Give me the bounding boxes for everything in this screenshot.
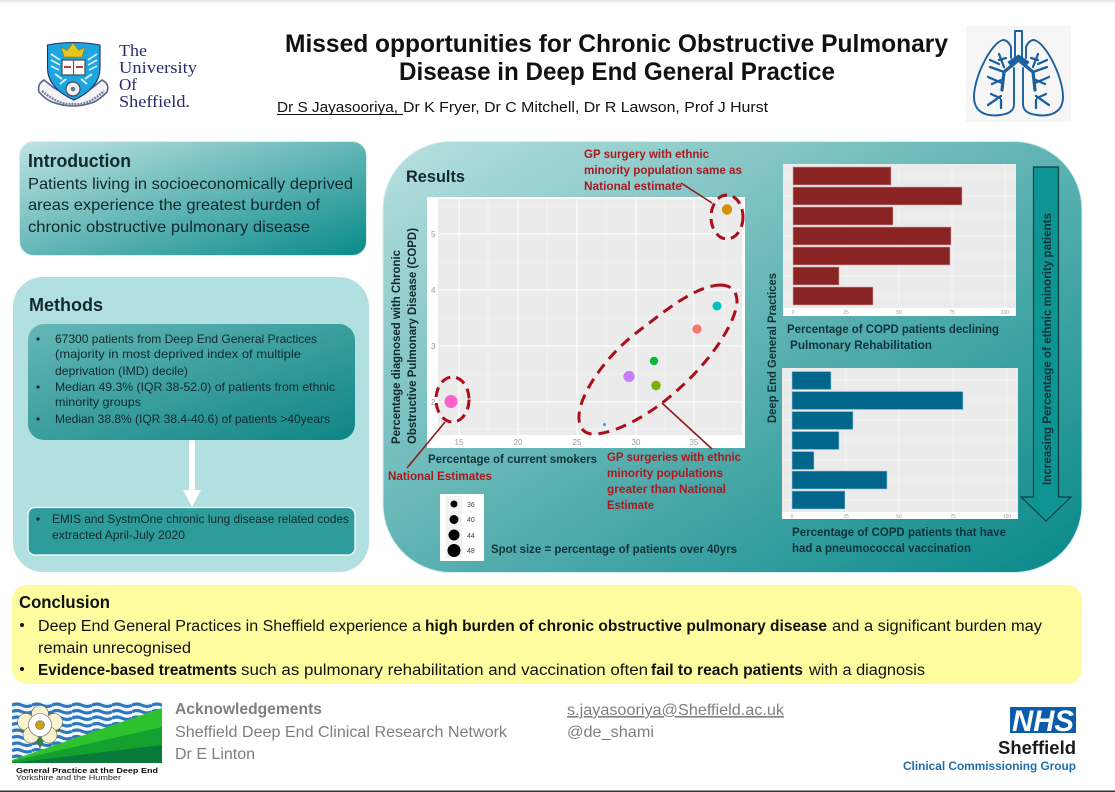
wordmark: The — [119, 41, 147, 60]
text: contact details: @de_shami — [567, 724, 654, 741]
bar chart: declining pulmonary rehabilitation: 25 — [843, 310, 849, 316]
text: acknowledgements: Acknowledgements — [175, 701, 322, 718]
caption: declining pulmonary rehabilitation: Percentage of COPD patients declining — [787, 322, 999, 336]
axis tick labels: 4 — [431, 286, 436, 295]
logo: general practice at the deep end: General Practice at the Deep End — [16, 766, 158, 775]
callout: greater than national estimate: greater than National — [607, 482, 726, 496]
heading: introduction: Introduction — [28, 151, 131, 171]
box: study population: Median 38.8% (IQR 38.4-40.6) of patients >40years — [55, 412, 330, 426]
bar chart: pneumococcal vaccination: 0 — [791, 514, 794, 520]
text: introduction body — [28, 176, 353, 236]
heading: methods: Methods — [29, 295, 103, 315]
title: Missed opportunities for Chronic Obstructive Pulmonary — [285, 30, 948, 58]
text: introduction body: areas experience the greatest burden of — [28, 197, 321, 214]
panel: methods — [13, 277, 369, 572]
heading: results: Results — [406, 167, 465, 186]
panel: introduction — [20, 142, 366, 256]
callout: national estimates: National Estimates — [388, 469, 492, 483]
box: study population: 67300 patients from Deep End General Practices — [55, 332, 317, 346]
arrow: increasing ethnic minority patients: Increasing Percentage of ethnic minority patients — [1040, 213, 1054, 485]
legend: spot size: 40 — [467, 517, 475, 524]
text: introduction body: chronic obstructive pulmonary disease — [28, 219, 310, 236]
text: conclusion bullets: remain unrecognised — [38, 640, 191, 657]
wordmark: University — [119, 58, 198, 77]
wordmark: Sheffield. — [119, 92, 190, 111]
caption: pneumococcal vaccination — [792, 525, 1006, 555]
wordmark: Of — [119, 75, 137, 94]
text: conclusion bullets: with a diagnosis — [808, 662, 925, 679]
text: conclusion bullets: fail to reach patients — [651, 662, 803, 679]
box: study population: deprivation (IMD) decile) — [55, 364, 188, 378]
axis tick labels: 15 — [455, 438, 464, 447]
bar chart: declining pulmonary rehabilitation: 75 — [949, 310, 955, 316]
text: acknowledgements: Dr E Linton — [175, 746, 255, 763]
icon: university crest — [39, 42, 108, 106]
text: conclusion bullets: such as pulmonary rehabilitation and vaccination often — [241, 662, 648, 679]
bar chart: declining pulmonary rehabilitation: 50 — [896, 310, 902, 316]
arrow: increasing ethnic minority patients — [1021, 167, 1071, 521]
scatter chart — [427, 197, 745, 448]
bar chart: declining pulmonary rehabilitation: 0 — [792, 310, 795, 316]
callout: same as national estimate: minority population same as — [584, 163, 742, 177]
callout: same as national estimate: GP surgery with ethnic — [584, 147, 709, 161]
panel: conclusion — [12, 585, 1082, 684]
text: conclusion bullets: and a significant burden may — [832, 618, 1042, 635]
axis tick labels: 3 — [431, 342, 436, 351]
legend: spot size: 44 — [467, 533, 475, 540]
callout: greater than national estimate: minority populations — [607, 466, 723, 480]
logo: NHS Sheffield CCG: Clinical Commissioning Group — [903, 759, 1076, 773]
callout: greater than national estimate: GP surgeries with ethnic — [607, 450, 741, 464]
text: conclusion bullets: Deep End General Practices in Sheffield experience a — [38, 618, 421, 635]
logo: NHS Sheffield CCG: NHS — [1012, 705, 1074, 738]
text: contact details — [567, 702, 785, 741]
callout: national estimates — [388, 377, 492, 483]
caption: declining pulmonary rehabilitation — [787, 322, 999, 352]
y axis title: scatter — [389, 228, 419, 444]
y axis title: scatter: Obstructive Pulmonary Disease (COPD) — [405, 228, 419, 444]
axis tick labels — [431, 230, 699, 447]
bar chart: pneumococcal vaccination: 50 — [896, 514, 902, 520]
arrow: methods flow — [183, 440, 201, 507]
logo: NHS Sheffield CCG — [903, 705, 1076, 773]
callout: same as national estimate: National estimate — [584, 179, 682, 193]
icon: lungs — [966, 26, 1071, 122]
bar chart: declining pulmonary rehabilitation: 100 — [1001, 310, 1009, 316]
bar chart: pneumococcal vaccination: 100 — [1003, 514, 1011, 520]
callout: greater than national estimate — [579, 285, 741, 512]
axis tick labels: 20 — [514, 438, 523, 447]
panel: results — [383, 142, 1082, 572]
text: contact details: s.jayasooriya@Sheffield.ac.uk — [567, 702, 785, 719]
box: data extraction: EMIS and SystmOne chronic lung disease related codes — [52, 512, 349, 526]
box: study population: (majority in most deprived index of multiple — [55, 347, 301, 361]
axis tick labels: 30 — [632, 438, 641, 447]
title: Disease in Deep End General Practice — [399, 58, 835, 86]
logo: NHS Sheffield CCG: Sheffield — [998, 738, 1076, 758]
axis tick labels: 5 — [431, 230, 436, 239]
title — [285, 30, 948, 86]
legend: spot size — [440, 494, 484, 561]
bar chart: pneumococcal vaccination — [782, 368, 1018, 520]
text: introduction body: Patients living in socioeconomically deprived — [28, 176, 353, 193]
text: acknowledgements — [175, 701, 508, 763]
logo: general practice at the deep end — [12, 702, 162, 782]
text: conclusion bullets: Evidence-based treatments — [38, 662, 237, 679]
legend caption: Spot size = percentage of patients over 40yrs — [491, 542, 737, 556]
y axis title: bar charts: Deep End General Practices — [765, 273, 779, 423]
text: conclusion bullets: high burden of chronic obstructive pulmonary disease — [425, 618, 827, 635]
logo: general practice at the deep end: Yorkshire and the Humber — [16, 773, 122, 782]
caption: pneumococcal vaccination: had a pneumococcal vaccination — [792, 541, 971, 555]
text: conclusion bullets — [20, 618, 1042, 679]
heading: conclusion: Conclusion — [19, 592, 110, 612]
authors: Dr K Fryer, Dr C Mitchell, Dr R Lawson, Prof J Hurst — [403, 99, 769, 116]
data points — [444, 204, 732, 426]
axis tick labels: 25 — [573, 438, 582, 447]
legend: spot size: 48 — [467, 548, 475, 555]
box: study population: Median 49.3% (IQR 38-52.0) of patients from ethnic — [55, 380, 335, 394]
wordmark — [119, 41, 198, 111]
text: acknowledgements: Sheffield Deep End Clinical Research Network — [175, 724, 508, 741]
caption: pneumococcal vaccination: Percentage of COPD patients that have — [792, 525, 1006, 539]
authors: Dr S Jayasooriya, — [277, 99, 398, 116]
box: study population: minority groups — [55, 395, 141, 409]
caption: declining pulmonary rehabilitation: Pulmonary Rehabilitation — [790, 338, 932, 352]
box: data extraction: extracted April-July 2020 — [52, 528, 185, 542]
callout: same as national estimate — [584, 147, 743, 239]
box: data extraction — [28, 508, 355, 555]
logo: University of Sheffield — [39, 41, 198, 111]
axis tick labels: 2 — [431, 398, 436, 407]
y axis title: scatter: Percentage diagnosed with Chronic — [389, 250, 403, 444]
callout: greater than national estimate: Estimate — [607, 498, 654, 512]
bar chart: declining pulmonary rehabilitation — [783, 164, 1016, 316]
legend: spot size: 36 — [467, 502, 475, 509]
x axis title: scatter: Percentage of current smokers — [428, 452, 597, 466]
icon: yorkshire rose — [18, 706, 62, 748]
bar chart: pneumococcal vaccination: 75 — [950, 514, 956, 520]
box: study population — [28, 324, 355, 440]
axis tick labels: 35 — [690, 438, 699, 447]
bar chart: pneumococcal vaccination: 25 — [843, 514, 849, 520]
